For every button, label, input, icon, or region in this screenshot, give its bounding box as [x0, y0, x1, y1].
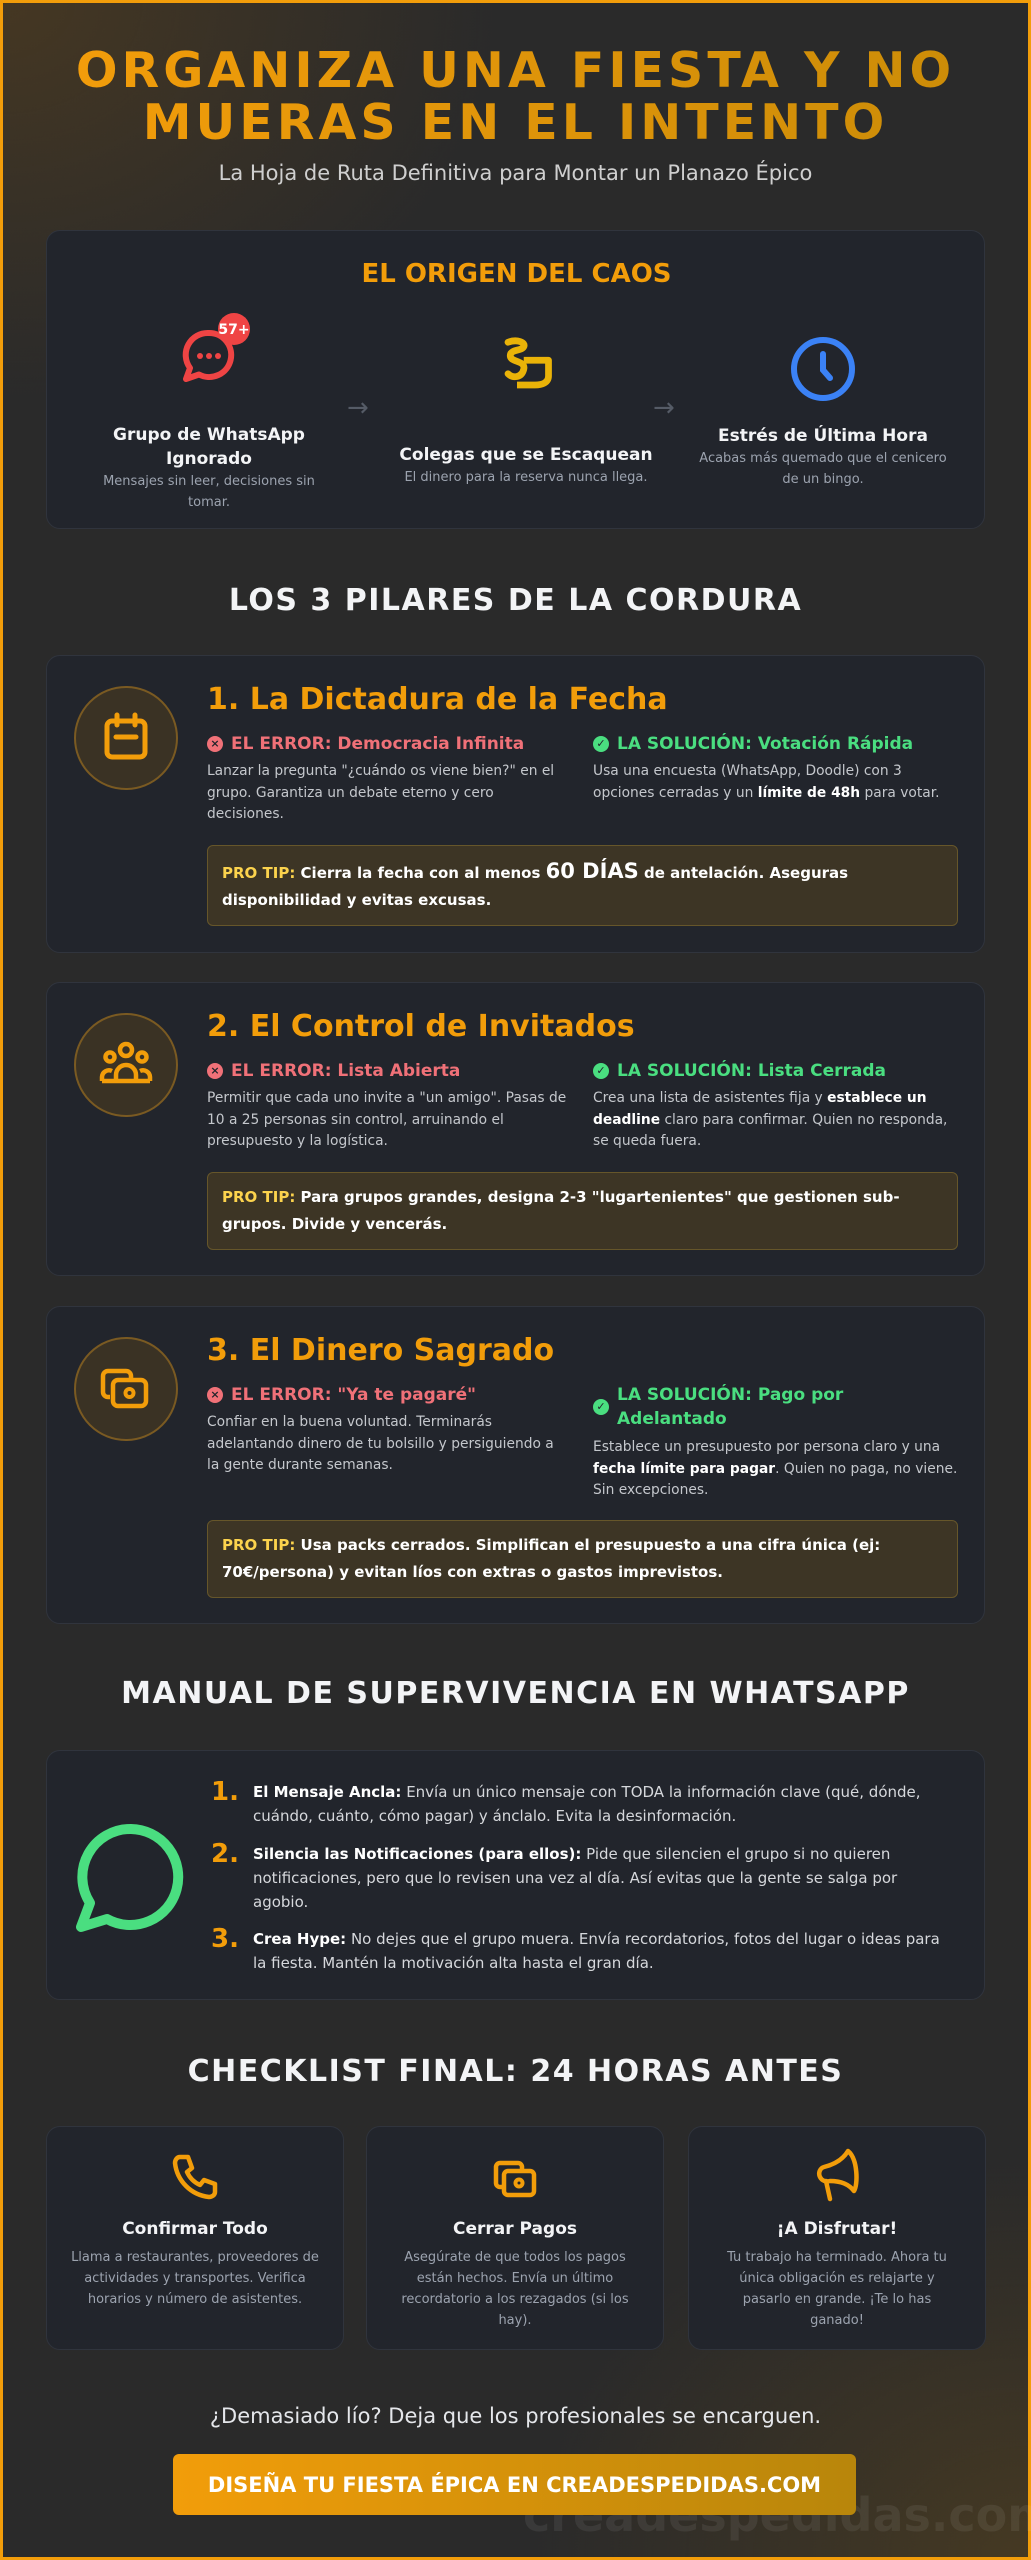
item 2: 2.: [211, 1839, 239, 1869]
card: confirmar todo: Confirmar Todo: [122, 2219, 268, 2239]
error label: ×: [210, 1388, 220, 1401]
step: whatsapp ignorado: Mensajes sin leer, decisiones sin: [103, 474, 315, 489]
pro tip: [207, 1520, 958, 1598]
step: whatsapp ignorado: Ignorado: [166, 449, 252, 469]
error label: EL ERROR: "Ya te pagaré": [231, 1385, 476, 1405]
solution text: Establece un presupuesto por persona claro y una fecha límite para pagar. Quien no paga, no viene. Sin excepciones.: [593, 1439, 957, 1498]
panel: whatsapp manual: El Mensaje Ancla: Envía un único mensaje con TODA la información clave (qué, dónde, cuándo, cuánto, cómo pagar) y ánclalo. Evita la desinformación.: [253, 1783, 921, 1825]
card: cerrar pagos: Asegúrate de que todos los pagos están hechos. Envía un último recordatorio a los rezagados (si los hay).: [401, 2250, 629, 2328]
step: estres de ultima hora: [699, 337, 947, 487]
panel: pilar 2 invitados: [46, 982, 985, 1276]
icon: money: [74, 1337, 178, 1441]
title: [0, 45, 1031, 149]
solution label: LA SOLUCIÓN: Votación Rápida: [617, 734, 913, 754]
solution text: Usa una encuesta (WhatsApp, Doodle) con 3 opciones cerradas y un límite de 48h para votar.: [593, 763, 939, 800]
pillar title: 1. La Dictadura de la Fecha: [207, 682, 668, 717]
step: whatsapp ignorado: Grupo de WhatsApp: [113, 425, 305, 445]
step: colegas que se escaquean: [399, 337, 653, 485]
panel: origen del caos: [46, 230, 985, 529]
icon: group: [74, 1013, 178, 1117]
pillar title: 3. El Dinero Sagrado: [207, 1333, 554, 1368]
step: colegas que se escaquean: El dinero para la reserva nunca llega.: [404, 470, 648, 485]
pro tip: PRO TIP: Para grupos grandes, designa 2-3 "lugartenientes" que gestionen sub-grupos. Divide y vencerás.: [222, 1188, 900, 1233]
solution label: Adelantado: [617, 1409, 727, 1429]
card: confirmar todo: [46, 2126, 344, 2350]
solution label: ✓: [596, 1400, 606, 1413]
icon: megaphone: [816, 2148, 859, 2202]
card: confirmar todo: Llama a restaurantes, proveedores de actividades y transportes. Verifica horarios y número de asistentes.: [71, 2250, 319, 2307]
solution text: Crea una lista de asistentes fija y establece un deadline claro para confirmar. Quien no responda, se queda fuera.: [593, 1090, 947, 1149]
pro tip: PRO TIP: Cierra la fecha con al menos 60 DÍAS de antelación. Aseguras disponibilidad y evitas excusas.: [222, 858, 848, 908]
pro tip: [207, 845, 958, 926]
panel: whatsapp manual: Crea Hype: No dejes que el grupo muera. Envía recordatorios, fotos del lugar o ideas para la fiesta. Mantén la motivación alta hasta el gran día.: [253, 1930, 940, 1972]
solution label: ✓: [596, 1064, 606, 1077]
icon: hand with money: [504, 337, 552, 388]
heading: manual whatsapp: MANUAL DE SUPERVIVENCIA EN WHATSAPP: [121, 1676, 910, 1711]
panel: pilar 1 fecha: [46, 655, 985, 953]
step: estres de ultima hora: Acabas más quemado que el cenicero: [699, 451, 947, 466]
solution label: [593, 1384, 844, 1429]
card: cerrar pagos: [366, 2126, 664, 2350]
card: cerrar pagos: Cerrar Pagos: [453, 2219, 577, 2239]
item 3: 3.: [211, 1924, 239, 1954]
error text: Lanzar la pregunta "¿cuándo os viene bien?" en el grupo. Garantiza un debate eterno y cero decisiones.: [207, 763, 554, 822]
step: whatsapp ignorado: tomar.: [188, 495, 230, 510]
step: colegas que se escaquean: Colegas que se Escaquean: [399, 445, 653, 465]
arrow: →: [653, 393, 675, 423]
cta button: DISEÑA TU FIESTA ÉPICA EN CREADESPEDIDAS.COM: [208, 2472, 821, 2496]
panel: whatsapp manual: [46, 1750, 985, 2000]
error label: ×: [210, 737, 220, 750]
panel: whatsapp manual: Silencia las Notificaciones (para ellos): Pide que silencien el grupo si no quieren notificaciones, pero que lo revisen una vez al día. Así evitas que la gente se salga por agobio.: [253, 1845, 897, 1911]
title: MUERAS EN EL INTENTO: [143, 94, 888, 151]
card: a disfrutar: [688, 2126, 986, 2350]
step: estres de ultima hora: Estrés de Última Hora: [718, 426, 928, 446]
card: a disfrutar: Tu trabajo ha terminado. Ahora tu única obligación es relajarte y pasarlo en grande. ¡Te lo has ganado!: [727, 2250, 947, 2328]
icon: phone: [172, 2154, 218, 2200]
error text: Confiar en la buena voluntad. Terminarás adelantando dinero de tu bolsillo y persiguiendo a la gente durante semanas.: [207, 1414, 554, 1473]
heading: los 3 pilares: LOS 3 PILARES DE LA CORDURA: [229, 583, 802, 618]
panel: pilar 3 dinero: [46, 1306, 985, 1624]
icon: money: [494, 2160, 536, 2198]
cta text: ¿Demasiado lío? Deja que los profesionales se encarguen.: [210, 2404, 821, 2428]
icon: chat bubble with badge: [182, 313, 250, 382]
step: whatsapp ignorado: [103, 313, 315, 510]
arrow: →: [347, 393, 369, 423]
icon: chat bubble with badge: 57+: [218, 322, 250, 338]
pillar title: 2. El Control de Invitados: [207, 1009, 635, 1044]
card: a disfrutar: ¡A Disfrutar!: [777, 2219, 897, 2239]
icon: calendar: [74, 686, 178, 790]
step: estres de ultima hora: de un bingo.: [782, 472, 864, 487]
cta button: [173, 2454, 856, 2515]
solution label: LA SOLUCIÓN: Lista Cerrada: [617, 1061, 886, 1081]
pro tip: PRO TIP: Usa packs cerrados. Simplifican el presupuesto a una cifra única (ej: 70€/persona) y evitan líos con extras o gastos imprevistos.: [222, 1536, 880, 1581]
icon: whatsapp bubble: [76, 1824, 184, 1932]
error label: EL ERROR: Democracia Infinita: [231, 734, 524, 754]
error label: ×: [210, 1064, 220, 1077]
error text: Permitir que cada uno invite a "un amigo". Pasas de 10 a 25 personas sin control, arruinando el presupuesto y la logística.: [207, 1090, 566, 1149]
solution label: LA SOLUCIÓN: Pago por: [617, 1385, 843, 1405]
pro tip: [207, 1172, 958, 1250]
heading: checklist: CHECKLIST FINAL: 24 HORAS ANTES: [188, 2054, 843, 2089]
solution label: ✓: [596, 737, 606, 750]
subtitle: La Hoja de Ruta Definitiva para Montar un Planazo Épico: [219, 161, 812, 185]
icon: clock: [791, 337, 855, 401]
item 1: 1.: [211, 1777, 239, 1807]
title: ORGANIZA UNA FIESTA Y NO: [76, 42, 955, 99]
error label: EL ERROR: Lista Abierta: [231, 1061, 460, 1081]
heading: el origen del caos: EL ORIGEN DEL CAOS: [361, 259, 672, 289]
